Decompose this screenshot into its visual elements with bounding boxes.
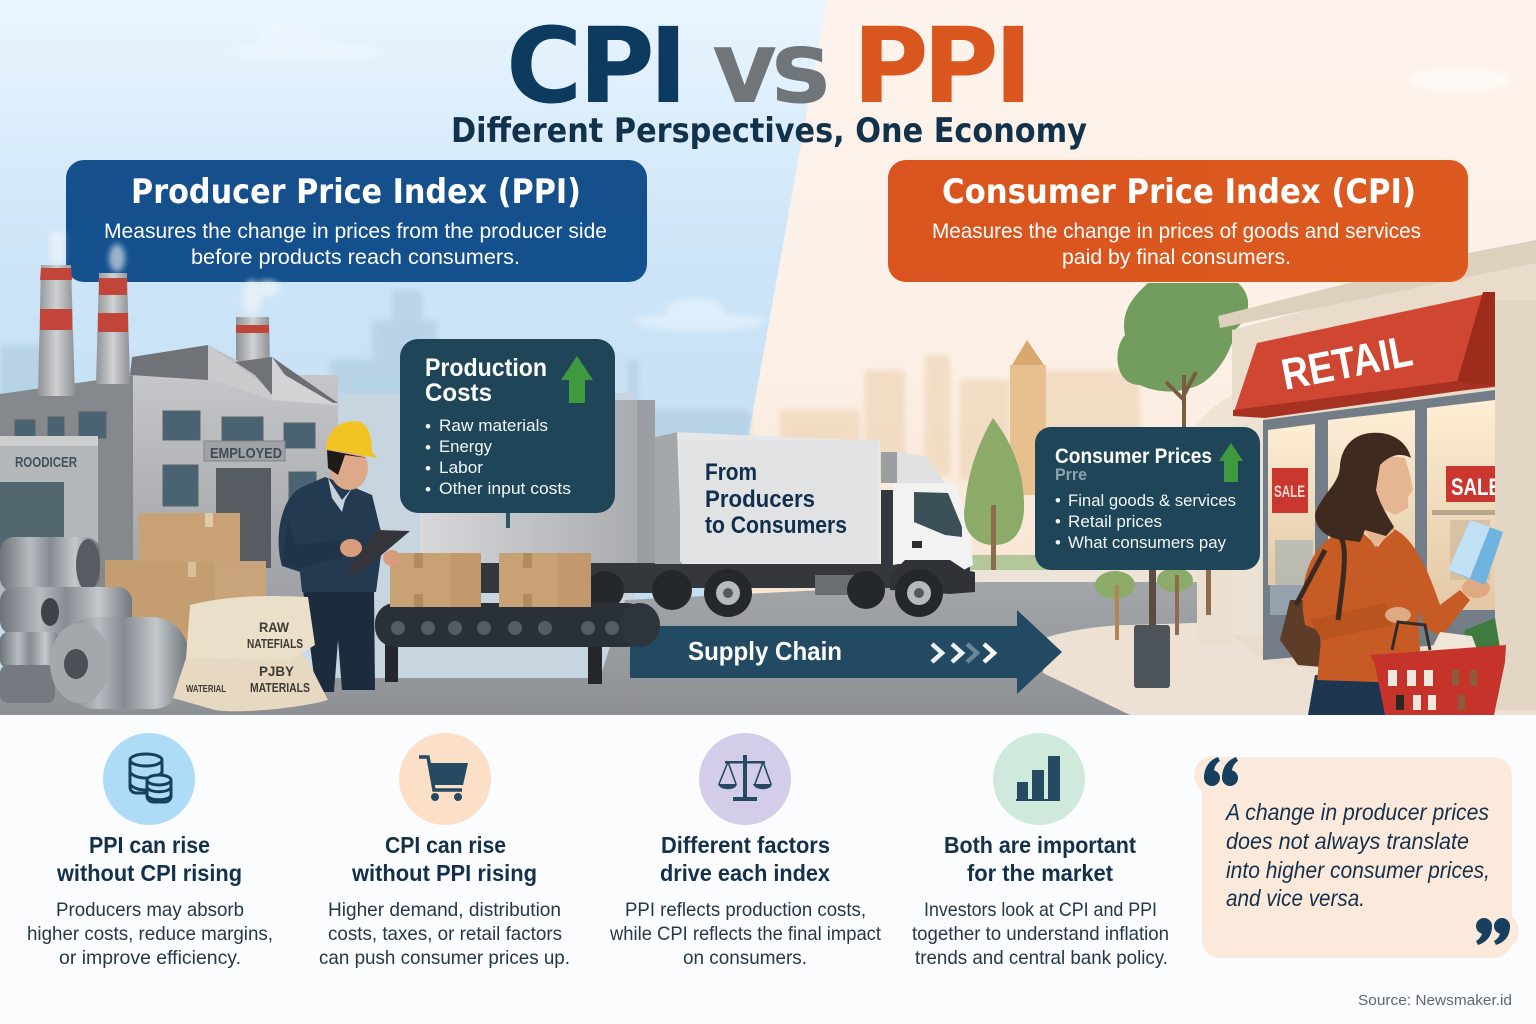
sack top <box>186 596 315 660</box>
panel heading: Consumer Prices <box>1055 445 1212 468</box>
takeaway: different factors <box>609 733 882 969</box>
quote text: and vice versa. <box>1226 885 1365 911</box>
trousers <box>303 590 375 692</box>
right sky <box>749 0 1536 594</box>
takeaway: PPI can rise <box>27 733 273 969</box>
panel: CPI definition: Consumer Price Index (CPI) <box>942 172 1416 212</box>
bullet list: • <box>425 417 431 436</box>
left sky <box>0 0 830 715</box>
hands <box>1462 578 1490 598</box>
panel heading: Costs <box>425 379 492 407</box>
sack bottom <box>173 652 328 711</box>
body: on consumers. <box>683 947 807 969</box>
small building <box>0 436 98 611</box>
body: costs, taxes, or retail factors <box>328 923 562 945</box>
stacked boxes <box>105 513 266 645</box>
bullet list: • <box>1055 534 1061 552</box>
panel: CPI definition <box>888 160 1468 282</box>
consumer prices panel <box>1035 427 1260 570</box>
chimneys in front of panel <box>38 232 280 396</box>
quote bump bottom <box>1481 912 1519 950</box>
road <box>0 582 1197 715</box>
awning: RETAIL <box>1278 327 1416 400</box>
source: Source: Newsmaker.id <box>1358 993 1512 1009</box>
heading: drive each index <box>660 860 830 886</box>
smoke <box>50 232 280 316</box>
body: Higher demand, distribution <box>328 899 561 921</box>
sleeve <box>282 541 342 568</box>
tree left <box>964 418 1024 570</box>
truck label: Producers <box>705 486 815 513</box>
tree right <box>1117 283 1248 430</box>
saw-tooth roof <box>130 345 338 405</box>
delivery truck <box>652 432 977 617</box>
icon: scales <box>699 733 791 825</box>
right pier <box>1495 300 1536 710</box>
subtitle: Different Perspectives, One Economy <box>451 111 1087 151</box>
chimney one <box>38 265 75 396</box>
chevrons <box>932 644 994 662</box>
title: PPI <box>852 5 1033 127</box>
body <box>27 899 273 969</box>
truck label: From <box>705 459 757 486</box>
basket <box>1370 618 1506 715</box>
takeaway: both important <box>912 733 1169 969</box>
neck and face <box>1362 455 1413 547</box>
title: CPI <box>506 5 688 127</box>
panel: CPI definition: paid by final consumers. <box>1062 245 1291 269</box>
panel: PPI definition: before products reach consumers. <box>191 245 520 269</box>
supply chain arrow: Supply Chain <box>688 636 842 666</box>
grass strip <box>970 555 1050 570</box>
clouds <box>637 70 1506 332</box>
production costs panel <box>400 339 615 513</box>
shopping bag <box>1280 600 1322 667</box>
up arrow <box>1219 443 1243 482</box>
sack labels: MATERIALS <box>250 680 310 695</box>
back trailer <box>420 400 660 609</box>
pale yard behind conveyor <box>335 393 635 680</box>
hands <box>340 539 362 557</box>
factory <box>0 317 338 611</box>
quote text: does not always translate <box>1226 828 1469 854</box>
collar <box>328 478 352 512</box>
icon: cart <box>399 733 491 825</box>
orange tower <box>1010 340 1046 495</box>
body: PPI reflects production costs, <box>625 899 866 921</box>
heading: without CPI rising <box>56 860 242 886</box>
panel: PPI definition: Measures the change in prices from the producer side <box>104 219 607 243</box>
skyline left <box>0 290 752 437</box>
chimney two <box>96 273 130 384</box>
title <box>506 5 1033 127</box>
icon: bar chart <box>993 733 1085 825</box>
head <box>330 446 368 490</box>
body <box>609 899 882 969</box>
conveyor belt <box>375 553 660 684</box>
bullet list: • <box>425 480 431 499</box>
ghost text: Prre <box>1055 465 1087 484</box>
heading: CPI can rise <box>385 832 506 858</box>
sweater <box>1303 528 1470 683</box>
bullet list: Final goods & services <box>1068 492 1236 510</box>
factory door <box>216 468 271 568</box>
panel heading <box>425 354 547 407</box>
quote bump top <box>1194 756 1232 794</box>
factory sign <box>204 441 285 462</box>
bullet list: • <box>425 459 431 478</box>
conveyor boxes <box>390 553 591 607</box>
skyline right <box>780 355 1140 490</box>
bullet list: Other input costs <box>439 479 571 498</box>
heading: Different factors <box>661 832 830 858</box>
street post <box>1134 570 1170 688</box>
bullet list: What consumers pay <box>1068 534 1227 552</box>
hair <box>1315 433 1411 542</box>
truck label: to Consumers <box>705 512 847 539</box>
sale sign one <box>1272 468 1308 513</box>
awning <box>1233 292 1495 418</box>
up arrow <box>561 356 593 403</box>
panel: PPI definition: Producer Price Index (PPI) <box>131 172 581 212</box>
sale sign two: SALE <box>1451 474 1501 501</box>
bullet list: • <box>1055 492 1061 510</box>
forearm <box>1310 603 1392 640</box>
body: Producers may absorb <box>56 899 244 921</box>
body <box>319 899 570 969</box>
sack labels <box>186 619 310 695</box>
sack labels: NATEFIALS <box>247 636 303 651</box>
body: trends and central bank policy. <box>915 947 1168 969</box>
truck cab <box>881 452 977 594</box>
small building: ROODICER <box>15 454 77 471</box>
hard hat <box>326 421 377 458</box>
body: while CPI reflects the final impact <box>609 923 882 945</box>
icon: closing quote mark <box>1476 918 1510 945</box>
takeaway: CPI can rise <box>319 733 570 969</box>
truck chassis <box>660 564 970 588</box>
icon: opening quote mark <box>1204 757 1238 786</box>
chimney three <box>236 317 270 365</box>
near sidewalk <box>1043 622 1536 715</box>
supply chain arrow <box>630 610 1062 694</box>
sack labels: RAW <box>259 619 290 635</box>
panel: PPI definition <box>66 160 647 282</box>
factory windows <box>14 410 316 506</box>
sacks <box>173 596 328 711</box>
body: or improve efficiency. <box>59 947 241 969</box>
bullet list: Raw materials <box>439 416 548 435</box>
heading <box>944 832 1136 886</box>
bullet list: Energy <box>439 437 492 456</box>
storefront <box>1218 240 1536 710</box>
shopper <box>1280 433 1506 715</box>
bullet list: Labor <box>439 458 483 477</box>
heading: Both are important <box>944 832 1136 858</box>
heading: for the market <box>967 860 1113 886</box>
left pier <box>1232 400 1264 635</box>
icon: coins <box>103 733 195 825</box>
production panel stem <box>506 512 510 528</box>
cargo box <box>655 432 880 564</box>
beige annex behind tree <box>1195 395 1232 427</box>
product box <box>1448 520 1503 585</box>
sale sign one: SALE <box>1274 482 1305 501</box>
beige pillars <box>1197 570 1232 645</box>
worker <box>279 421 410 692</box>
bullet list: • <box>425 438 431 457</box>
body: together to understand inflation <box>912 923 1169 945</box>
sack labels: WATERIAL <box>186 684 226 695</box>
shop windows <box>1263 390 1495 660</box>
clipboard <box>345 530 410 575</box>
bullet list: • <box>1055 513 1061 531</box>
steel coils <box>0 537 188 709</box>
skirt <box>1308 675 1387 715</box>
callout: quote <box>1194 756 1519 958</box>
heading <box>56 832 242 886</box>
sack labels: PJBY <box>259 663 295 679</box>
sale sign two <box>1446 466 1501 502</box>
bullet list <box>1055 492 1236 552</box>
quote text <box>1224 799 1490 911</box>
wheels <box>652 569 943 617</box>
panel: CPI definition: Measures the change in prices of goods and services <box>932 219 1421 243</box>
factory sign: EMPLOYED <box>210 445 282 462</box>
cornice <box>1218 240 1536 328</box>
body: higher costs, reduce margins, <box>27 923 273 945</box>
saplings <box>1095 568 1211 640</box>
body <box>912 899 1169 969</box>
truck label <box>705 464 846 533</box>
far sidewalk <box>970 570 1197 582</box>
body: can push consumer prices up. <box>319 947 570 969</box>
bullet list <box>425 416 571 499</box>
quote text: into higher consumer prices, <box>1226 857 1490 883</box>
jacket <box>279 477 383 592</box>
heading: without PPI rising <box>351 860 537 886</box>
quote text: A change in producer prices <box>1224 799 1489 825</box>
heading <box>351 832 537 886</box>
body: Investors look at CPI and PPI <box>924 899 1157 921</box>
title: vs <box>712 9 831 126</box>
facade <box>1232 250 1536 710</box>
side wing <box>0 375 133 610</box>
heading: PPI can rise <box>89 832 210 858</box>
heading <box>660 832 830 886</box>
panel heading: Production <box>425 354 547 382</box>
illustrated scene <box>0 0 1536 715</box>
front wall <box>133 375 338 610</box>
bag strap <box>1296 530 1344 620</box>
bullet list: Retail prices <box>1068 513 1162 531</box>
